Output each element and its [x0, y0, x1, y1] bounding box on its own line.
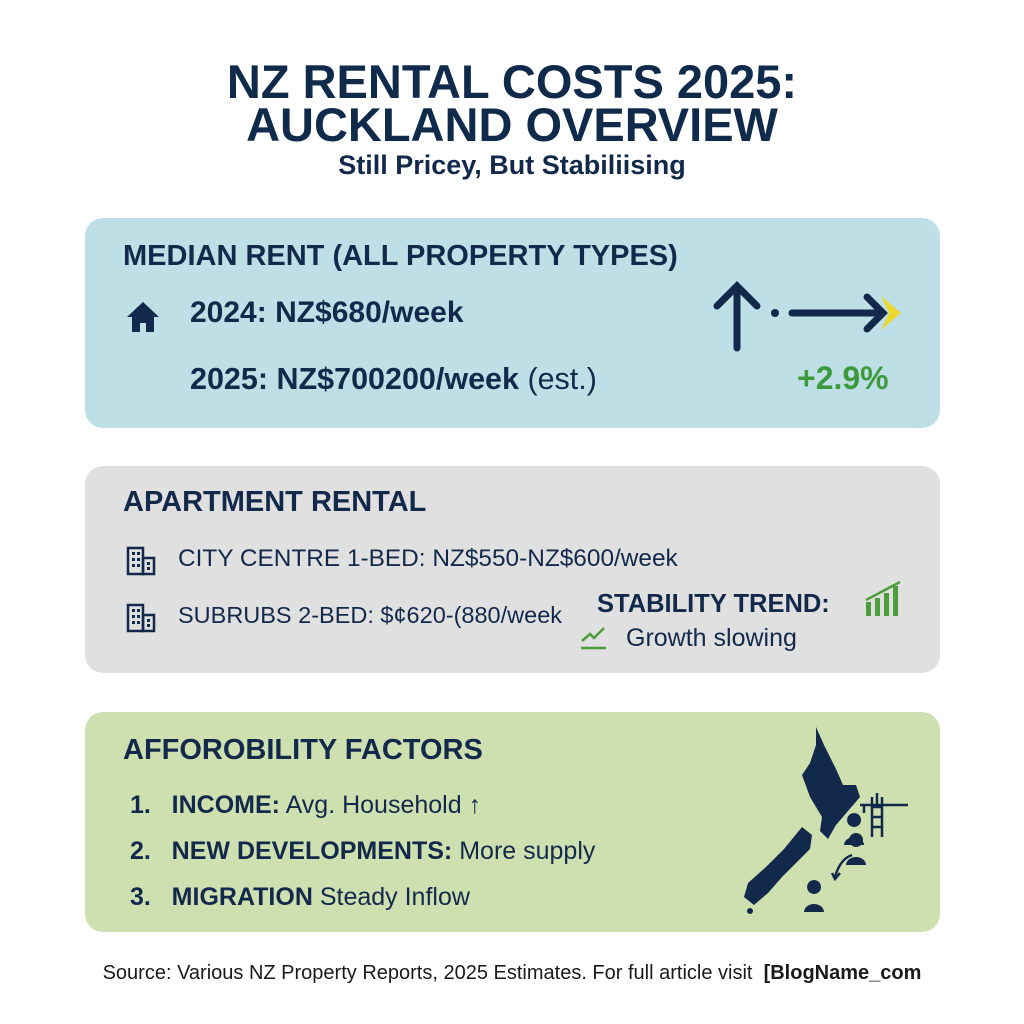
list: factors: 1. INCOME: Avg. Household ↑: [130, 791, 481, 819]
icon: building 2: [126, 604, 156, 632]
list: factors: [130, 791, 596, 911]
text: percent change: +2.9%: [797, 360, 889, 396]
title: NZ RENTAL COSTS 2025:: [227, 55, 797, 108]
icon: bar chart: [866, 580, 900, 616]
panel: apartment rental: [85, 466, 940, 673]
list: factors: 3. MIGRATION Steady Inflow: [130, 883, 470, 911]
text: 2024 rent: 2024: NZ$680/week: [190, 296, 464, 329]
icon: NZ map with people: [744, 727, 908, 914]
icon: house: [127, 302, 159, 332]
heading: median rent: MEDIAN RENT (ALL PROPERTY TYPES): [123, 240, 678, 272]
icon: building 1: [126, 546, 156, 576]
icon: trend arrows: [714, 281, 901, 352]
footer: source: Source: Various NZ Property Reports, 2025 Estimates. For full article visit [BlogName_com: [103, 962, 921, 984]
title: AUCKLAND OVERVIEW: [246, 98, 778, 151]
title: [227, 55, 797, 151]
panel: median rent: [85, 218, 940, 428]
subtitle: Still Pricey, But Stabiliising: [338, 150, 686, 180]
text: 2025 rent: 2025: NZ$700200/week (est.): [190, 362, 597, 396]
heading: affordability: AFFOROBILITY FACTORS: [123, 734, 483, 766]
heading: stability trend: STABILITY TREND:: [597, 590, 830, 618]
text: growth slowing: Growth slowing: [626, 624, 797, 652]
icon: trend line: [581, 627, 606, 650]
heading: apartment rental: APARTMENT RENTAL: [123, 486, 426, 518]
text: suburbs: SUBRUBS 2-BED: $¢620-(880/week: [178, 602, 562, 628]
panel: affordability factors: [85, 712, 940, 932]
text: city centre: CITY CENTRE 1-BED: NZ$550-NZ$600/week: [178, 545, 678, 572]
list: factors: 2. NEW DEVELOPMENTS: More supply: [130, 837, 595, 865]
